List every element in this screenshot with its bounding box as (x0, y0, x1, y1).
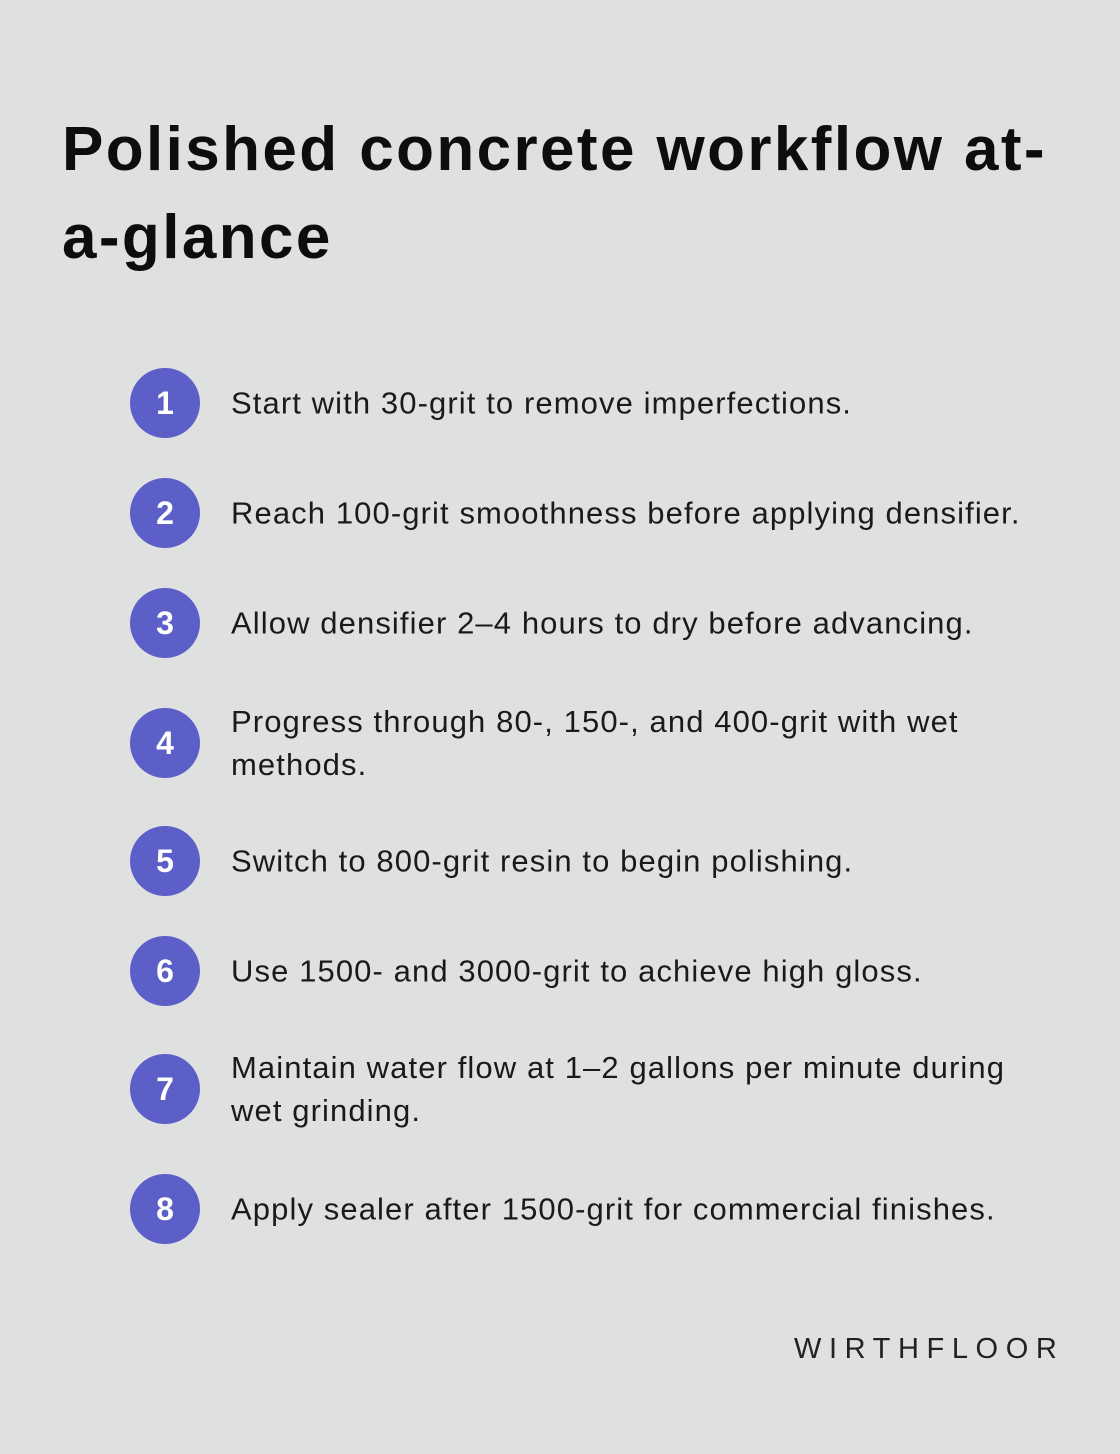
step 3: 3 (156, 605, 174, 641)
step 8: 8 (156, 1191, 174, 1227)
step 6: 6 (156, 953, 174, 989)
step 1: Start with 30-grit to remove imperfections. (231, 386, 852, 420)
step 7: wet grinding. (231, 1093, 421, 1128)
step 4 (130, 704, 959, 782)
logo: WIRTHFLOOR (794, 1333, 1064, 1365)
step 5: Switch to 800-grit resin to begin polishing. (231, 844, 853, 878)
step 2: 2 (156, 495, 174, 531)
step 8 (130, 1174, 996, 1244)
step 7: 7 (156, 1071, 174, 1107)
step 4: Progress through 80-, 150-, and 400-grit with wet (231, 704, 959, 739)
step 2 (130, 478, 1021, 548)
step 7: Maintain water flow at 1–2 gallons per minute during (231, 1050, 1005, 1085)
step 3: Allow densifier 2–4 hours to dry before advancing. (231, 606, 974, 640)
step 4: methods. (231, 747, 367, 782)
step 6 (130, 936, 923, 1006)
step 1 (130, 368, 852, 438)
title: Polished concrete workflow at- (62, 115, 1047, 184)
title: a-glance (62, 203, 333, 272)
step 1: 1 (156, 385, 174, 421)
title (62, 115, 1047, 272)
step 8: Apply sealer after 1500-grit for commercial finishes. (231, 1192, 996, 1226)
step 6: Use 1500- and 3000-grit to achieve high gloss. (231, 954, 923, 988)
step 2: Reach 100-grit smoothness before applying densifier. (231, 496, 1021, 530)
step 7 (130, 1050, 1005, 1128)
step 5: 5 (156, 843, 174, 879)
step 5 (130, 826, 853, 896)
step 4: 4 (156, 725, 174, 761)
step 3 (130, 588, 974, 658)
